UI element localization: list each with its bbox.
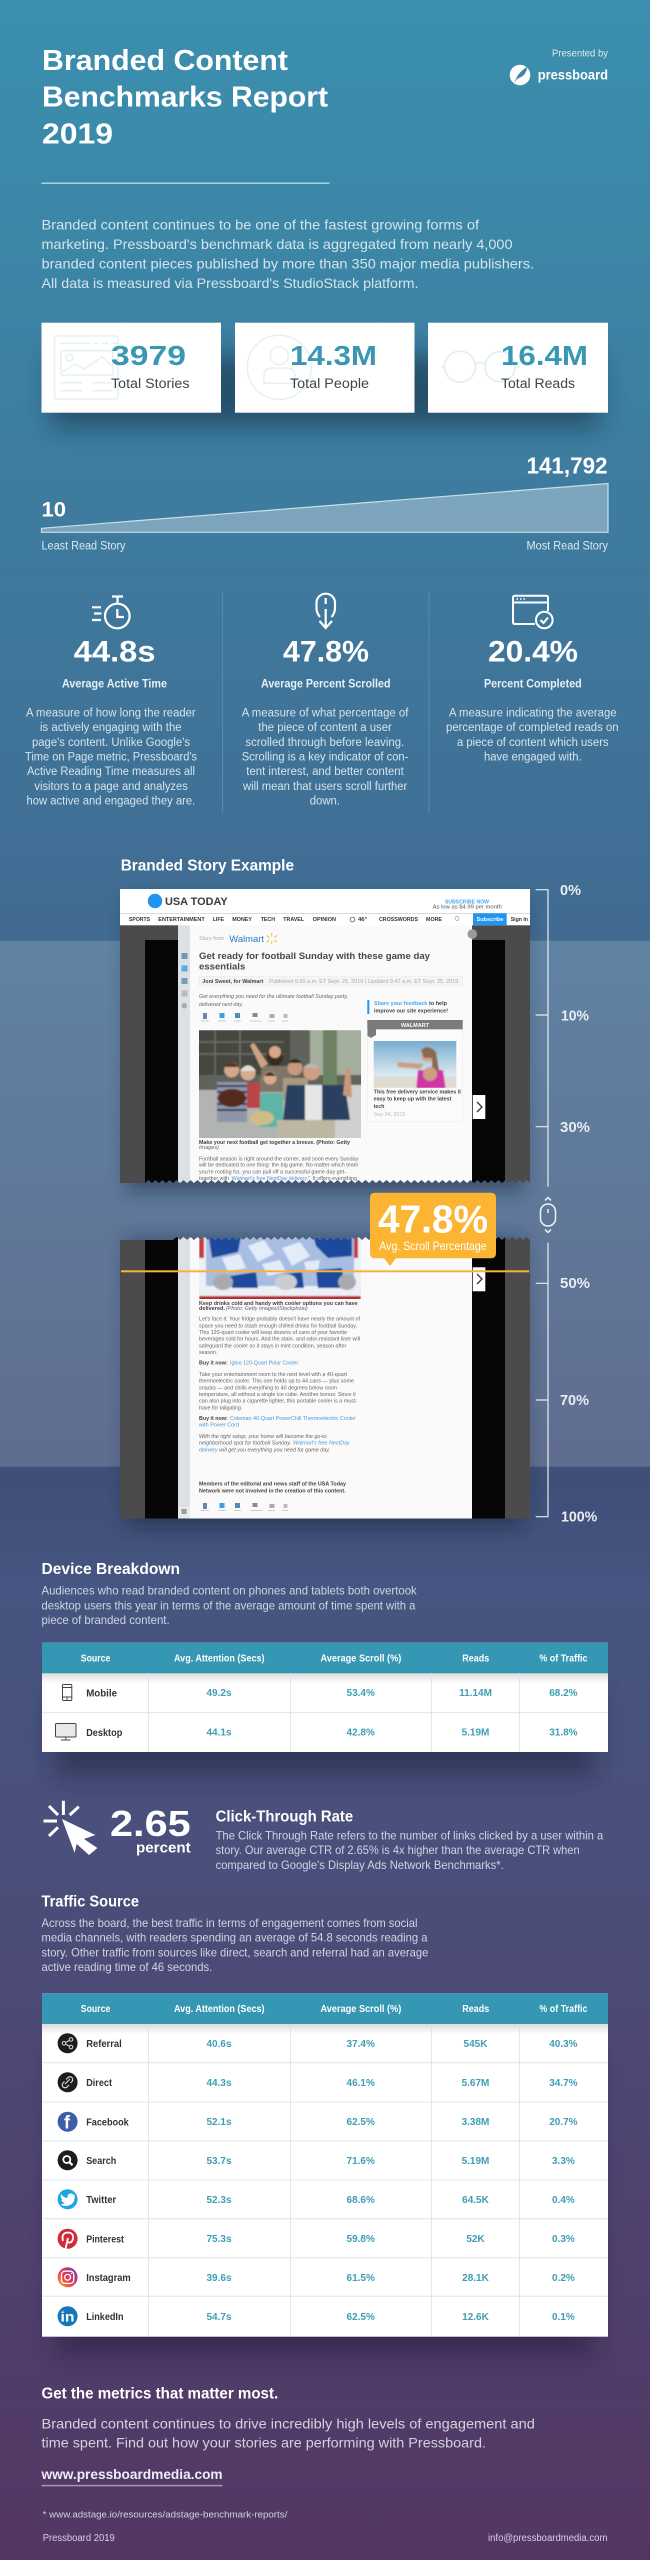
article paragraph: It offers everything <box>313 1176 357 1182</box>
row: facebook: 3.38M <box>462 2117 489 2128</box>
footer <box>43 2533 607 2544</box>
traffic source paragraph <box>42 1916 429 1974</box>
row: direct: 5.67M <box>462 2078 489 2089</box>
row: pinterest: 52K <box>466 2234 485 2245</box>
metric: average percent scrolled: the piece of content a user <box>258 722 392 734</box>
scroll ruler: top: 0% <box>560 882 581 899</box>
intro paragraph: All data is measured via Pressboard's StudioStack platform. <box>42 275 418 291</box>
table header: Avg. Attention (Secs) <box>174 1653 264 1665</box>
row: search: Search <box>86 2155 116 2167</box>
metric: average percent scrolled: A measure of what percentage of <box>242 708 409 720</box>
article text: snacks — and chills everything to 40 degrees below room <box>199 1385 337 1391</box>
screenshot shadows <box>126 900 524 1528</box>
header: title: Branded Content <box>42 45 288 77</box>
metric: average percent scrolled: will mean that users scroll further <box>242 781 407 793</box>
shadow under stat cards <box>50 355 600 427</box>
article header: delivered next day. <box>199 1002 243 1008</box>
row: mobile: 49.2s <box>206 1688 232 1699</box>
presented by pressboard logo <box>510 48 609 85</box>
metric: percent completed: 20.4% <box>488 636 578 669</box>
metric: average active time: how active and engaged they are. <box>26 795 195 807</box>
row: linkedin: 12.6K <box>462 2312 490 2323</box>
scroll ruler: top <box>536 882 590 1187</box>
row: desktop <box>56 1724 578 1740</box>
row: instagram: 61.5% <box>347 2273 375 2284</box>
article paragraph: you're rooting for, you can pull off a successful game day get- <box>199 1169 346 1175</box>
intro paragraph: branded content pieces published by more than 350 major media publishers. <box>42 256 534 272</box>
USA Today nav bar: LIFE <box>213 917 224 923</box>
table header: Source <box>81 1653 110 1665</box>
footer: Pressboard 2019 <box>43 2533 115 2544</box>
article text: neighborhood spot for football Sunday. <box>199 1441 291 1447</box>
USA Today nav bar: TECH <box>261 917 275 923</box>
article text <box>199 1301 361 1494</box>
row: mobile: 11.14M <box>459 1688 492 1699</box>
icon: twitter bird <box>58 2189 78 2209</box>
USA Today masthead: SUBSCRIBE NOW <box>445 900 489 906</box>
row: mobile: Mobile <box>86 1688 117 1700</box>
USA Today masthead <box>120 889 530 913</box>
device breakdown paragraph: piece of branded content. <box>42 1613 170 1627</box>
share rail icons <box>182 953 188 1008</box>
row: direct: 44.3s <box>206 2078 232 2089</box>
row: desktop: 42.8% <box>347 1728 375 1738</box>
icon: pinterest <box>58 2229 78 2249</box>
metric: average active time: Time on Page metric, Pressboard's <box>25 751 197 763</box>
icon: person <box>247 335 311 399</box>
USA Today masthead: As low as $4.99 per month <box>433 905 502 911</box>
row: desktop: Desktop <box>86 1727 122 1739</box>
row: mobile: 53.4% <box>347 1688 375 1699</box>
wedge chart: least to most read story <box>42 452 608 552</box>
metric: average percent scrolled: Scrolling is a key indicator of con- <box>242 751 409 763</box>
table header: Reads <box>462 1653 489 1665</box>
row: referral <box>58 2033 578 2053</box>
table header <box>81 2003 588 2015</box>
stat card: total reads: Total Reads <box>501 376 575 391</box>
intro paragraph: marketing. Pressboard's benchmark data is aggregated from nearly 4,000 <box>42 236 513 252</box>
icon: facebook <box>58 2112 78 2132</box>
click-through rate stat: 2.65 <box>110 1803 191 1844</box>
icon: mouse with down arrow <box>316 594 335 628</box>
icon: share <box>58 2033 78 2053</box>
click-through rate stat: The Click Through Rate refers to the number of links clicked by a user within a <box>216 1828 603 1842</box>
scroll ruler: top: 30% <box>560 1119 590 1136</box>
USA Today nav bar: Subscribe <box>476 917 504 923</box>
USA Today nav bar: Sign In <box>511 917 529 923</box>
row: twitter: 0.4% <box>552 2195 575 2206</box>
article text: can also plug into a cigarette lighter, this portable cooler is a must- <box>199 1399 358 1405</box>
metric: average percent scrolled: down. <box>310 795 340 807</box>
article header: essentials <box>199 961 245 972</box>
row: referral: 545K <box>464 2039 488 2050</box>
icon: cursor click <box>44 1801 97 1855</box>
icon: browser window with check <box>513 596 553 628</box>
click-through rate stat: story. Our average CTR of 2.65% is 4x higher than the average CTR when <box>216 1843 580 1857</box>
row: desktop: 44.1s <box>206 1728 232 1738</box>
row: linkedin <box>58 2306 575 2326</box>
article text: thermoelectric cooler. This one holds up to 44 cans — plus some <box>199 1379 354 1385</box>
row: facebook: Facebook <box>86 2116 129 2128</box>
stat card: total stories: 3979 <box>111 340 186 371</box>
article text: season. <box>199 1350 217 1356</box>
article paragraph: will be dedicated to one thing: the big game. No matter which team <box>199 1163 358 1169</box>
metric: average active time: 44.8s <box>74 636 156 669</box>
row: mobile <box>62 1684 578 1700</box>
table header: % of Traffic <box>539 2003 588 2015</box>
website link: www.pressboardmedia.com <box>41 2466 223 2482</box>
row: search <box>58 2150 575 2170</box>
icon: linkedin <box>58 2306 78 2326</box>
row: facebook: 20.7% <box>549 2117 578 2128</box>
traffic source paragraph: story. Other traffic from sources like direct, search and referral had an average <box>42 1945 429 1959</box>
stat card: total stories <box>42 323 221 413</box>
article header: Joni Sweet, for Walmart <box>202 979 264 985</box>
screenshot: USA Today article top: Images) <box>199 1145 219 1151</box>
row: instagram: 0.2% <box>552 2273 575 2284</box>
article text: Igloo 120-Quart Polar Cooler <box>230 1361 299 1367</box>
next article arrow <box>473 1095 485 1119</box>
stat card: total people <box>235 323 414 413</box>
header: title: 2019 <box>42 118 113 150</box>
metric: average active time: A measure of how long the reader <box>26 708 196 720</box>
article text: Buy it now: <box>199 1416 228 1422</box>
device breakdown paragraph: Audiences who read branded content on phones and tablets both overtook <box>42 1584 418 1598</box>
callout: 47.8% average scroll percentage <box>370 1193 496 1266</box>
row: instagram: 39.6s <box>206 2273 232 2284</box>
article paragraph: Football season is right around the corner, and soon every Sunday <box>199 1156 359 1162</box>
row: search: 3.3% <box>552 2156 575 2167</box>
row: referral: Referral <box>86 2038 122 2050</box>
table header: Average Scroll (%) <box>320 2003 401 2015</box>
article text: Buy it now: <box>199 1361 228 1367</box>
heading: branded story example: Branded Story Example <box>121 858 294 875</box>
traffic source paragraph: Across the board, the best traffic in terms of engagement comes from social <box>42 1916 418 1930</box>
row: pinterest: 59.8% <box>347 2234 375 2245</box>
stat card: total reads: 16.4M <box>501 340 588 371</box>
metric: percent completed: percentage of completed reads on <box>446 722 619 734</box>
article header: Get everything you need for the ultimate football Sunday party, <box>199 994 348 1000</box>
sidebar: Walmart card: This free delivery service makes it <box>374 1089 461 1095</box>
USA Today nav bar: 46° <box>358 917 367 923</box>
share row icons <box>201 1013 288 1021</box>
USA Today nav bar: SPORTS <box>129 917 150 923</box>
article text: Members of the editorial and news staff of the USA Today <box>199 1482 346 1488</box>
row: twitter: Twitter <box>86 2194 116 2206</box>
next article arrow <box>473 1267 485 1291</box>
table header: Average Scroll (%) <box>320 1653 401 1665</box>
article paragraph <box>199 1156 359 1182</box>
row: twitter: 68.6% <box>347 2195 375 2206</box>
article text: Let's face it: Your fridge probably doesn't have nearly the amount of <box>199 1317 361 1323</box>
click-through rate stat: percent <box>136 1840 191 1857</box>
row: pinterest <box>58 2229 575 2249</box>
article header: Published 9:30 a.m. ET Sept. 25, 2019 | Updated 9:47 a.m. ET Sept. 25, 2019 <box>269 979 459 985</box>
metric: percent completed: have engaged with. <box>484 751 582 763</box>
row: referral: 40.3% <box>549 2039 578 2050</box>
icon: glasses <box>441 351 520 382</box>
heading: device breakdown: Device Breakdown <box>42 1561 180 1578</box>
article text: temperature, all without a single ice cube. Another bonus: Since it <box>199 1392 356 1398</box>
table header: Avg. Attention (Secs) <box>174 2003 264 2015</box>
traffic source paragraph: media channels, with readers spending an average of 54.8 seconds reading a <box>42 1931 428 1945</box>
row: linkedin: 62.5% <box>347 2312 375 2323</box>
USA Today nav bar: MORE <box>426 917 442 923</box>
row: direct: Direct <box>86 2077 112 2089</box>
article text: Take your entertainment room to the next level with a 40-quart <box>199 1372 348 1378</box>
row: desktop: 5.19M <box>462 1728 489 1738</box>
row: twitter: 52.3s <box>206 2195 232 2206</box>
table header: Reads <box>462 2003 489 2015</box>
row: facebook <box>58 2112 578 2132</box>
heading: traffic source: Traffic Source <box>42 1894 139 1911</box>
sidebar: Walmart card: Sep 24, 2019 <box>374 1112 406 1118</box>
row: pinterest: 0.3% <box>552 2234 575 2245</box>
share row icons <box>201 1503 288 1510</box>
article text: space you need to stash enough chilled drinks for football Sunday. <box>199 1323 357 1329</box>
article text: This 120-quart cooler will keep dozens of cans of your favorite <box>199 1330 347 1336</box>
article header: Get ready for football Sunday with these game day <box>199 951 431 962</box>
device breakdown paragraph: desktop users this year in terms of the average amount of time spent with a <box>42 1598 416 1612</box>
article header <box>199 929 477 1008</box>
USA Today nav bar <box>120 913 530 925</box>
metric: average percent scrolled: 47.8% <box>283 636 369 669</box>
scroll ruler: top: 10% <box>561 1007 589 1024</box>
stat card: total people: 14.3M <box>290 340 377 371</box>
USA Today nav bar: MONEY <box>232 917 252 923</box>
article text: (Photo: Getty Images/iStockphoto) <box>226 1306 308 1312</box>
sidebar: feedback prompt: Share your feedback <box>374 1001 427 1007</box>
footnote: * www.adstage.io/resources/adstage-benchmark-reports/ <box>43 2509 288 2520</box>
icon: instagram <box>58 2267 78 2287</box>
article paragraph: Walmart's free NextDay delivery." <box>232 1176 310 1182</box>
row: desktop: 31.8% <box>549 1728 578 1738</box>
stat card: total stories: Total Stories <box>111 376 190 391</box>
intro paragraph <box>42 216 534 291</box>
metric: average percent scrolled <box>242 594 409 807</box>
shadow under traffic table <box>55 2050 595 2355</box>
footer: info@pressboardmedia.com <box>488 2533 607 2544</box>
screenshot: USA Today article top: Make your next football get together a breeze. (Photo: Getty <box>199 1140 350 1146</box>
sidebar: Walmart card: WALMART <box>401 1023 429 1029</box>
row: facebook: 62.5% <box>347 2117 375 2128</box>
scroll ruler: bottom <box>536 1243 597 1526</box>
icon: scroll mouse <box>540 1198 556 1232</box>
article header: Story from <box>199 936 224 942</box>
closing paragraph <box>42 2415 535 2451</box>
row: twitter <box>58 2189 575 2209</box>
metric: average active time: Active Reading Time measures all <box>27 766 195 778</box>
photo: cooler with ice and cans <box>199 1237 361 1299</box>
row: pinterest: Pinterest <box>86 2234 124 2246</box>
sidebar: feedback prompt: to help <box>429 1001 448 1007</box>
row: instagram: 28.1K <box>462 2273 490 2284</box>
metric: percent completed <box>446 596 619 763</box>
sidebar: Walmart card: tech <box>374 1104 384 1110</box>
stat card: total reads <box>428 323 608 413</box>
wedge chart: least to most read story: 10 <box>42 499 66 522</box>
row: search: 71.6% <box>347 2156 375 2167</box>
closing paragraph: Branded content continues to drive incredibly high levels of engagement and <box>42 2415 535 2431</box>
icon: desktop <box>56 1724 76 1740</box>
column dividers <box>223 592 429 813</box>
row: direct: 46.1% <box>347 2078 375 2089</box>
icon: phone <box>62 1684 72 1700</box>
article text: Network were not involved in the creation of this content. <box>199 1488 346 1494</box>
USA Today nav bar: ENTERTAINMENT <box>158 917 205 923</box>
sidebar: feedback prompt: improve our site experience! <box>374 1008 448 1014</box>
row: pinterest: 75.3s <box>206 2234 232 2245</box>
screenshot: USA Today article top <box>120 889 530 1190</box>
screenshot: USA Today article bottom <box>120 1230 530 1520</box>
article text: Coleman 40-Quart PowerChill Thermoelectric Cooler <box>230 1416 356 1422</box>
row: search: 53.7s <box>206 2156 232 2167</box>
scroll ruler: bottom: 100% <box>561 1508 597 1526</box>
row: search: 5.19M <box>462 2156 489 2167</box>
row: mobile: 68.2% <box>549 1688 578 1699</box>
USA Today nav bar: CROSSWORDS <box>379 917 418 923</box>
shadow under device table <box>55 1690 595 1775</box>
row: facebook: 52.1s <box>206 2117 232 2128</box>
traffic source paragraph: active reading time of 46 seconds. <box>42 1960 212 1974</box>
metric: average active time: Average Active Time <box>62 677 167 691</box>
row: referral: 40.6s <box>206 2039 232 2050</box>
metric: average percent scrolled: scrolled through before leaving. <box>245 737 404 749</box>
row: direct: 34.7% <box>549 2078 578 2089</box>
icon: facebook: f <box>64 2112 71 2132</box>
header: title: Benchmarks Report <box>42 82 328 114</box>
sidebar: Walmart card: easy to keep up with the latest <box>374 1097 452 1103</box>
icon: article <box>54 336 118 399</box>
scroll ruler: bottom: 50% <box>560 1275 590 1292</box>
icon: linkedin: in <box>60 2308 74 2324</box>
average scroll line <box>121 1270 529 1272</box>
article text: Keep drinks cold and handy with cooler options you can have <box>199 1301 358 1307</box>
closing paragraph: time spent. Find out how your stories are performing with Pressboard. <box>42 2435 486 2451</box>
article text: delivered. <box>199 1306 226 1312</box>
table header: Source <box>81 2003 110 2015</box>
sidebar: feedback prompt <box>367 1000 448 1014</box>
row: linkedin: LinkedIn <box>86 2311 124 2323</box>
click-through rate stat: Click-Through Rate <box>216 1809 354 1826</box>
presented by pressboard logo: pressboard <box>538 66 608 82</box>
article text: have for tailgating. <box>199 1405 242 1411</box>
row: referral: 37.4% <box>347 2039 375 2050</box>
lighter band behind story example <box>0 941 650 1467</box>
row: linkedin: 0.1% <box>552 2312 575 2323</box>
USA Today nav bar: OPINION <box>313 917 336 923</box>
row: linkedin: 54.7s <box>206 2312 232 2323</box>
row: twitter: 64.5K <box>462 2195 490 2206</box>
photo: woman on beach <box>374 1041 456 1088</box>
metric: average active time: is actively engaging with the <box>40 722 182 734</box>
icon: magnifier <box>58 2150 78 2170</box>
row: instagram <box>58 2267 575 2287</box>
icon: link <box>58 2072 78 2092</box>
wedge chart: least to most read story: Most Read Story <box>526 540 608 552</box>
article text: with Power Cord <box>199 1423 239 1429</box>
metric: average percent scrolled: Average Percent Scrolled <box>261 677 390 691</box>
wedge chart: least to most read story: Least Read Story <box>42 540 126 552</box>
article text: delivery <box>199 1447 218 1453</box>
table: device breakdown <box>42 1643 608 1752</box>
metric: average active time: visitors to a page and analyzes <box>34 781 188 793</box>
device breakdown paragraph <box>42 1584 418 1627</box>
row: direct <box>58 2072 578 2092</box>
article text: beverages cold for hours. And the stain- and odor-resistant liner will <box>199 1337 360 1343</box>
header: title <box>42 45 328 150</box>
USA Today nav bar: TRAVEL <box>283 917 305 923</box>
metric: average percent scrolled: tent interest, and better content <box>246 766 405 778</box>
table header: % of Traffic <box>539 1653 588 1665</box>
intro paragraph: Branded content continues to be one of the fastest growing forms of <box>42 216 479 232</box>
callout: 47.8% average scroll percentage: Avg. Scroll Percentage <box>379 1239 487 1253</box>
icon: stopwatch <box>92 596 130 628</box>
USA Today masthead: USA TODAY <box>165 896 228 908</box>
article paragraph: together with <box>199 1176 229 1182</box>
callout: 47.8% average scroll percentage: 47.8% <box>378 1199 488 1242</box>
metric: average active time <box>25 596 197 807</box>
article text: Walmart's free NextDay <box>293 1441 350 1447</box>
closing heading: Get the metrics that matter most. <box>42 2385 278 2402</box>
metric: percent completed: A measure indicating the average <box>449 708 616 720</box>
click-through rate stat <box>44 1801 603 1872</box>
scroll ruler: bottom: 70% <box>560 1392 589 1409</box>
presented by pressboard logo: Presented by <box>552 48 609 60</box>
article text: safeguard the cooler so it stays in mint condition, season after <box>199 1343 347 1349</box>
table header <box>81 1653 588 1665</box>
click-through rate stat: compared to Google's Display Ads Network Benchmarks*. <box>216 1858 504 1872</box>
table: traffic source <box>42 1993 608 2337</box>
sidebar: Walmart card <box>367 1020 463 1122</box>
metric: average active time: page's content. Unlike Google's <box>32 737 190 749</box>
article text: With the right setup, your home will become the go-to <box>199 1434 327 1440</box>
metric: percent completed: a piece of content which users <box>457 737 609 749</box>
wedge chart: least to most read story: 141,792 <box>526 452 608 478</box>
stat card: total people: Total People <box>290 376 369 391</box>
metric: percent completed: Percent Completed <box>484 677 582 691</box>
article text: will get you everything you need for game day. <box>219 1447 330 1453</box>
article header: Walmart <box>229 934 264 945</box>
row: instagram: Instagram <box>86 2272 131 2284</box>
photo: family watching football <box>199 1030 361 1138</box>
